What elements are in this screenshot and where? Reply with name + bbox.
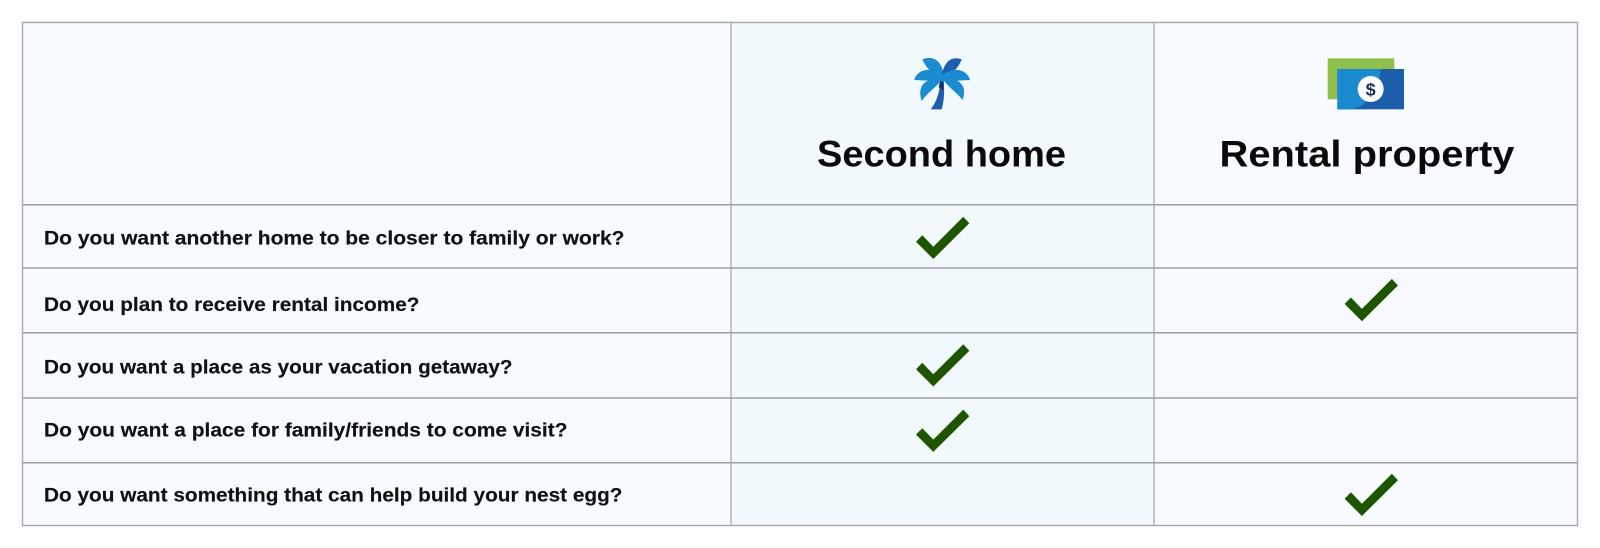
- question 5: Do you want something that can help build your nest egg?: [44, 486, 622, 507]
- question 1: Do you want another home to be closer to family or work?: [44, 228, 624, 250]
- heading: second home: Second home: [817, 134, 1066, 175]
- icon: palm tree: [914, 58, 970, 109]
- question 4: Do you want a place for family/friends to come visit?: [44, 421, 568, 442]
- check: question 3, second home: [916, 344, 969, 386]
- question 3: Do you want a place as your vacation getaway?: [44, 358, 512, 378]
- icon: money bill: $: [1366, 79, 1376, 99]
- check: question 4, second home: [916, 410, 969, 452]
- check: question 5, rental property: [1345, 474, 1398, 516]
- icon: money bill: [1328, 58, 1404, 109]
- question 2: Do you plan to receive rental income?: [44, 295, 420, 316]
- check: question 1, second home: [916, 217, 969, 259]
- heading: rental property: Rental property: [1220, 134, 1515, 175]
- check: question 2, rental property: [1345, 279, 1398, 321]
